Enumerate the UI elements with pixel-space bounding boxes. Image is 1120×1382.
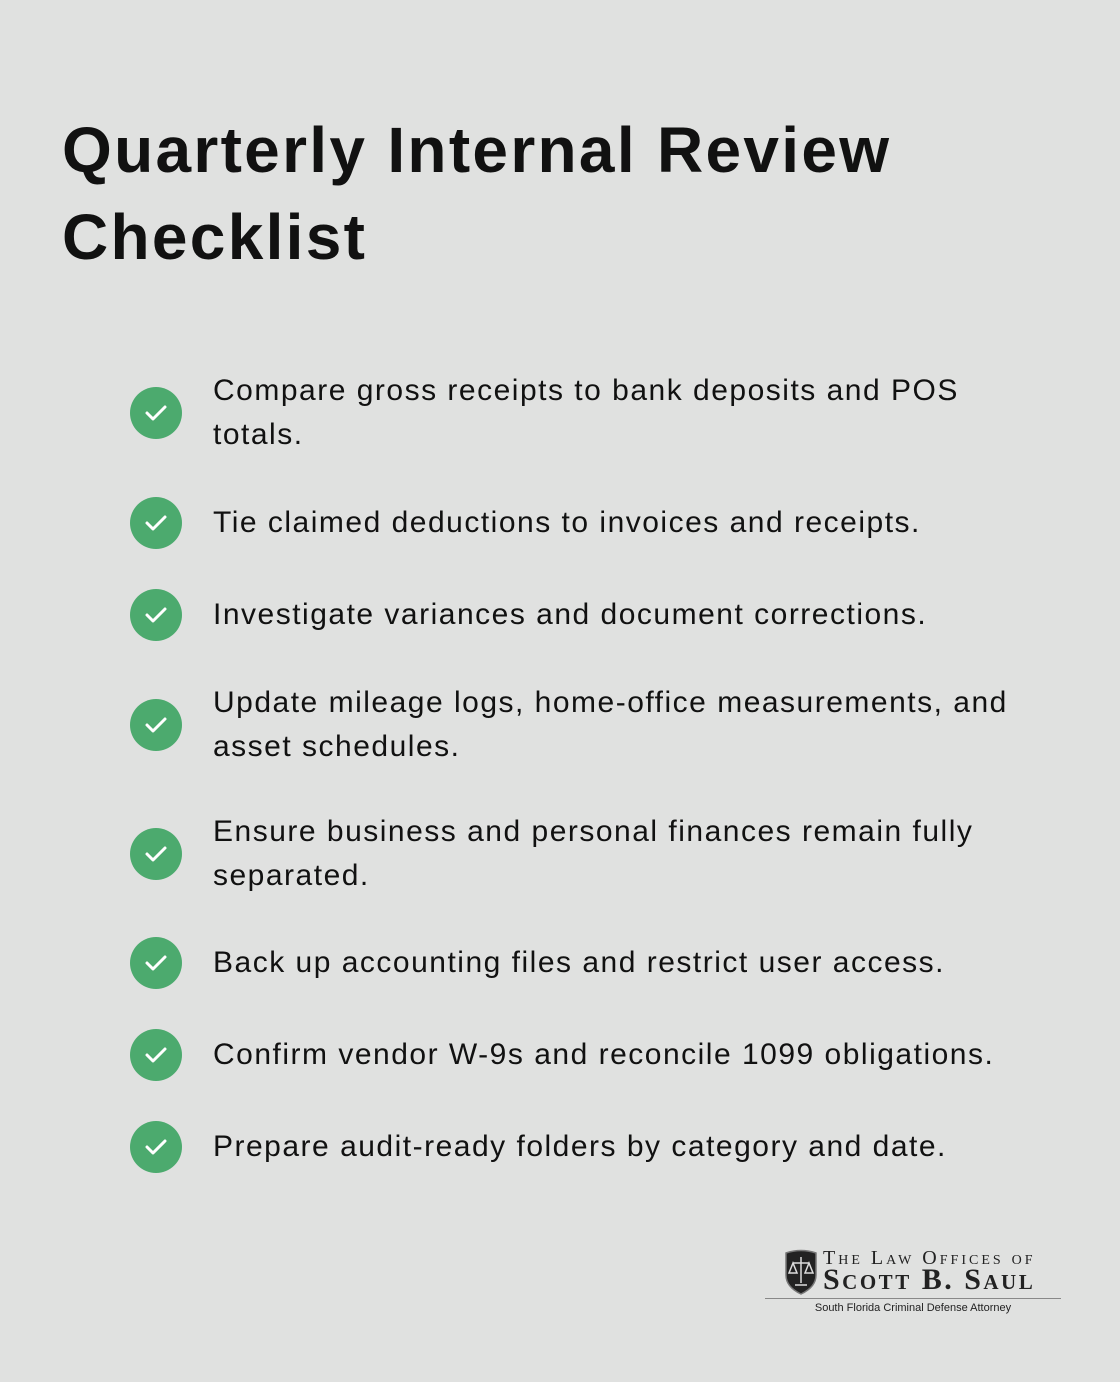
logo text: Scott B. Saul <box>823 1263 1035 1296</box>
item 7 <box>130 1029 994 1081</box>
logo text <box>823 1247 1036 1296</box>
item 5: Ensure business and personal finances remain fully <box>213 815 973 848</box>
item 6 <box>130 937 945 989</box>
item 3 <box>130 589 927 641</box>
item 4 <box>130 686 1008 763</box>
item 1: totals. <box>213 418 304 451</box>
item 4: Update mileage logs, home-office measurements, and <box>213 686 1008 719</box>
item 6: Back up accounting files and restrict user access. <box>213 946 945 979</box>
item 3: Investigate variances and document corrections. <box>213 598 927 631</box>
logo <box>765 1247 1061 1314</box>
item 4: asset schedules. <box>213 730 460 763</box>
item 2: Tie claimed deductions to invoices and receipts. <box>213 506 921 539</box>
title: Checklist <box>62 201 367 273</box>
item 5: separated. <box>213 859 370 892</box>
item 1 <box>130 374 959 451</box>
item 5 <box>130 815 973 892</box>
logo text: The Law Offices of <box>823 1247 1036 1269</box>
item 7: Confirm vendor W-9s and reconcile 1099 obligations. <box>213 1038 994 1071</box>
icon: shield with scales <box>785 1250 817 1295</box>
item 2 <box>130 497 921 549</box>
item 8 <box>130 1121 947 1173</box>
tagline: South Florida Criminal Defense Attorney <box>815 1302 1011 1314</box>
title <box>62 114 891 273</box>
item 8: Prepare audit-ready folders by category and date. <box>213 1130 947 1163</box>
item 1: Compare gross receipts to bank deposits and POS <box>213 374 959 407</box>
title: Quarterly Internal Review <box>62 114 891 186</box>
